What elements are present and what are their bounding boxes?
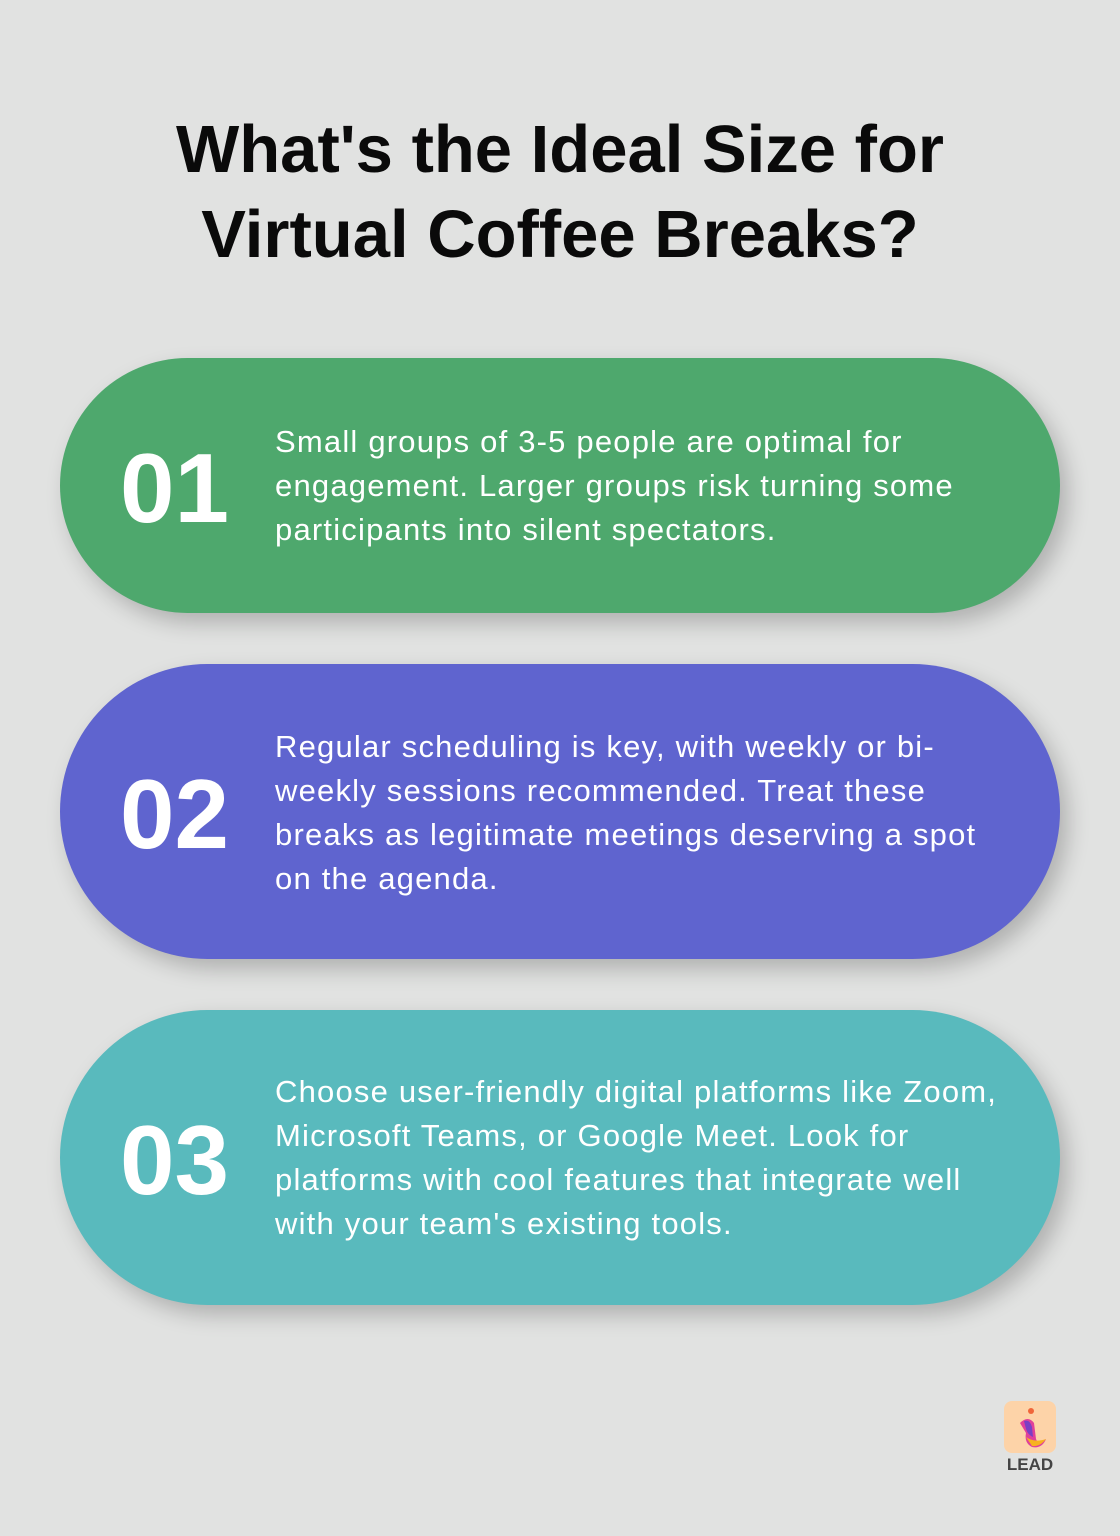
text 02: on the agenda. [275, 861, 499, 896]
text 03: Microsoft Teams, or Google Meet. Look for [275, 1118, 909, 1153]
text 03: Choose user-friendly digital platforms like Zoom, [275, 1074, 997, 1109]
title: What's the Ideal Size for [176, 112, 944, 187]
panel: step 03 [60, 1010, 1060, 1305]
text 03: with your team's existing tools. [275, 1206, 733, 1241]
text 02: breaks as legitimate meetings deserving a spot [275, 817, 976, 852]
text 01: engagement. Larger groups risk turning some [275, 468, 954, 503]
logo text: LEAD [1007, 1455, 1053, 1474]
title [176, 112, 944, 272]
text 03 [275, 1074, 997, 1241]
number 01: 01 [120, 433, 229, 543]
title: Virtual Coffee Breaks? [201, 197, 919, 272]
logo [1004, 1401, 1056, 1474]
panel: step 01 [60, 358, 1060, 613]
text 02: Regular scheduling is key, with weekly or bi- [275, 729, 935, 764]
text 02: weekly sessions recommended. Treat these [275, 773, 926, 808]
text 03: platforms with cool features that integrate well [275, 1162, 962, 1197]
number 03: 03 [120, 1105, 229, 1215]
text 01: Small groups of 3-5 people are optimal for [275, 424, 903, 459]
text 02 [275, 729, 976, 896]
text 01 [275, 424, 954, 547]
number 02: 02 [120, 759, 229, 869]
panel: step 02 [60, 664, 1060, 959]
icon: logo mark [1004, 1401, 1056, 1453]
text 01: participants into silent spectators. [275, 512, 777, 547]
